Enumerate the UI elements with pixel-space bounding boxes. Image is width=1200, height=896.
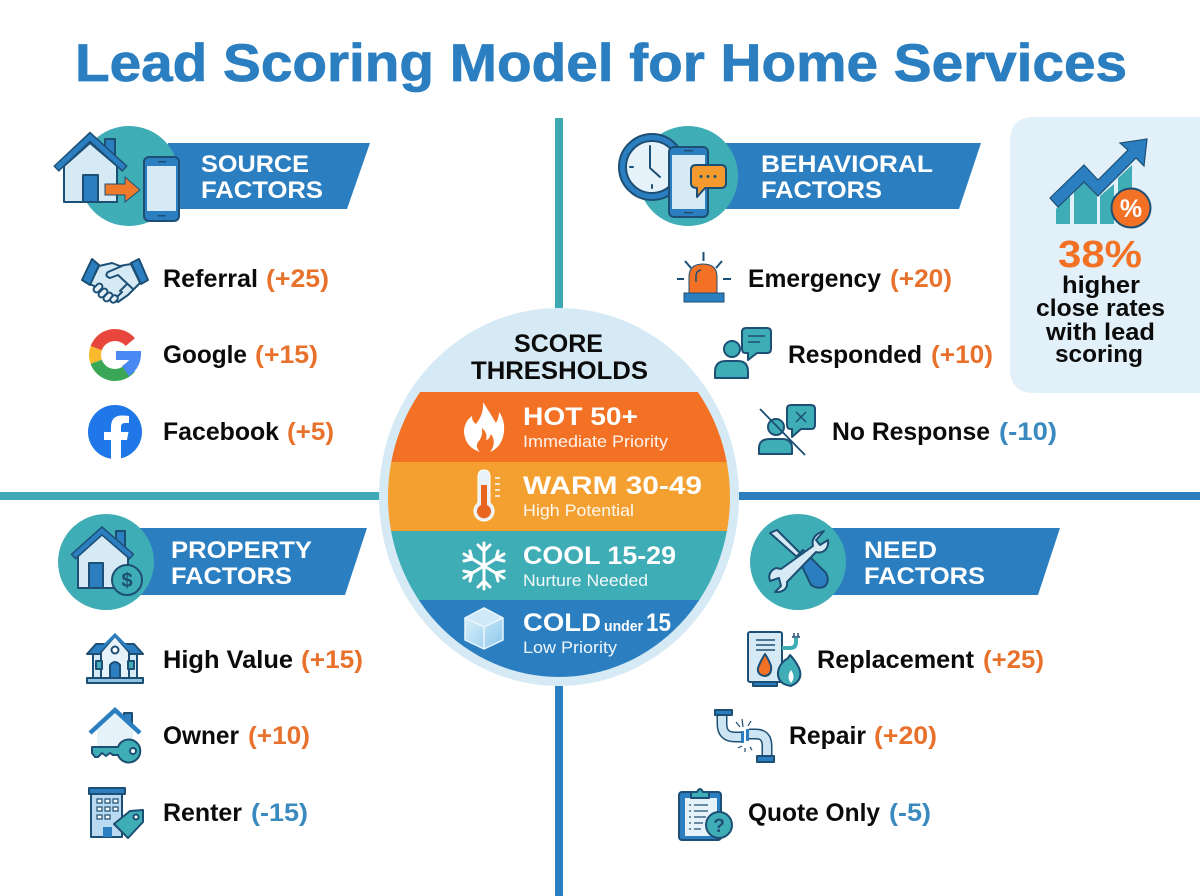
icon: ice cube [465,608,503,649]
heading: property factors [171,537,312,590]
band: cool: COOL 15-29 [523,542,676,570]
title: Lead Scoring Model for Home Services [75,34,1127,93]
heading: score thresholds: THRESHOLDS [471,357,648,385]
item: emergency: (+20) [890,265,952,293]
icon: snowflake [464,543,504,589]
banner: property factors [58,514,367,610]
item: renter: (-15) [251,799,308,827]
item: quote only: (-5) [889,799,931,827]
band: warm: High Potential [523,501,634,520]
heading: source factors: FACTORS [201,177,323,204]
item: google [95,335,318,376]
banner: behavioral factors [619,126,981,226]
band: cold: Low Priority [523,638,618,657]
banner: source factors [56,126,370,226]
item: referral [82,259,329,304]
icon: handshake [82,259,148,304]
item: repair: (+20) [874,722,937,750]
icon: house to phone [56,137,179,221]
icon: clock and phone [619,134,726,217]
panel: property factors [58,514,367,838]
item: owner: Owner [163,722,239,750]
icon: house with dollar coin [73,531,142,595]
text: higher close rates with lead scoring: with lead [1045,319,1155,346]
icon: flame [464,402,504,452]
item: facebook: (+5) [287,418,334,446]
icon: growth chart with percent badge: % [1120,195,1142,223]
item: google: (+15) [255,341,318,369]
heading: need factors: NEED [864,537,937,564]
heading: score thresholds: SCORE [514,330,603,358]
panel: behavioral factors [619,126,1057,455]
item: repair: Repair [789,722,866,750]
item: facebook [88,405,334,459]
band: cold: COLD [523,609,601,637]
item: renter [89,788,308,838]
heading: score thresholds [471,330,648,385]
icon: water heater with flames [748,632,800,686]
icon: house with key [90,710,140,763]
icon: large house [87,635,143,683]
heading: behavioral factors: FACTORS [761,177,882,204]
banner: need factors [750,514,1060,610]
heading: source factors [201,151,323,204]
text: higher close rates with lead scoring [1036,272,1165,368]
item: no response: (-10) [999,418,1057,446]
icon: person with speech bubble [715,328,771,378]
item: google: Google [163,341,247,369]
icon: google logo [95,335,141,376]
heading: behavioral factors [761,151,933,204]
item: emergency [677,252,952,302]
item: high value: High Value [163,646,293,674]
icon: clipboard with question mark [679,789,732,840]
panel: source factors [56,126,370,459]
text: higher close rates with lead scoring: close rates [1036,295,1165,322]
panel: need factors [679,514,1060,840]
callout: 38% higher close rates [1010,117,1200,393]
text: higher close rates with lead scoring: higher [1062,272,1140,299]
item: replacement [748,632,1044,686]
icon: clipboard with question mark: ? [713,816,725,837]
band: cool: Nurture Needed [523,571,648,590]
panel: score thresholds [379,308,740,686]
icon: siren [677,252,731,302]
icon: facebook logo [88,405,142,459]
heading: property factors: FACTORS [171,563,292,590]
icon: person crossed out [759,405,815,455]
icon: leaking pipe [715,710,774,762]
item: quote only [679,789,931,840]
band: cold: 15 [646,609,671,637]
stat: 38%: 38% [1058,234,1142,276]
item: owner: (+10) [248,722,310,750]
item: responded [715,328,993,378]
item: repair [715,710,937,762]
item: no response [759,405,1057,455]
band: cold [418,600,700,677]
item: replacement: (+25) [983,646,1044,674]
heading: property factors: PROPERTY [171,537,312,564]
text: higher close rates with lead scoring: scoring [1055,341,1143,368]
band: cool [380,531,740,600]
heading: source factors: SOURCE [201,151,309,178]
item: referral: Referral [163,265,258,293]
item: high value [87,635,363,683]
item: facebook: Facebook [163,418,279,446]
heading: need factors: FACTORS [864,563,985,590]
band: warm: WARM 30-49 [523,472,702,500]
heading: behavioral factors: BEHAVIORAL [761,151,933,178]
band: warm [380,462,740,531]
band: hot: HOT 50+ [523,403,638,431]
icon: wrench and screwdriver [769,530,828,592]
item: referral: (+25) [266,265,329,293]
item: renter: Renter [163,799,242,827]
item: quote only: Quote Only [748,799,880,827]
band: cold: under [604,618,643,635]
item: responded: Responded [788,341,922,369]
item: responded: (+10) [931,341,993,369]
icon: apartment with price tag [89,788,143,838]
item: replacement: Replacement [817,646,975,674]
heading: need factors [864,537,985,590]
icon: thermometer [474,470,500,521]
item: owner [90,710,310,763]
item: emergency: Emergency [748,265,881,293]
band: hot [380,392,740,462]
item: no response: No Response [832,418,990,446]
icon: house with dollar coin: $ [121,570,133,592]
item: high value: (+15) [301,646,363,674]
icon: growth chart with percent badge [1050,139,1150,228]
band: hot: Immediate Priority [523,432,669,451]
